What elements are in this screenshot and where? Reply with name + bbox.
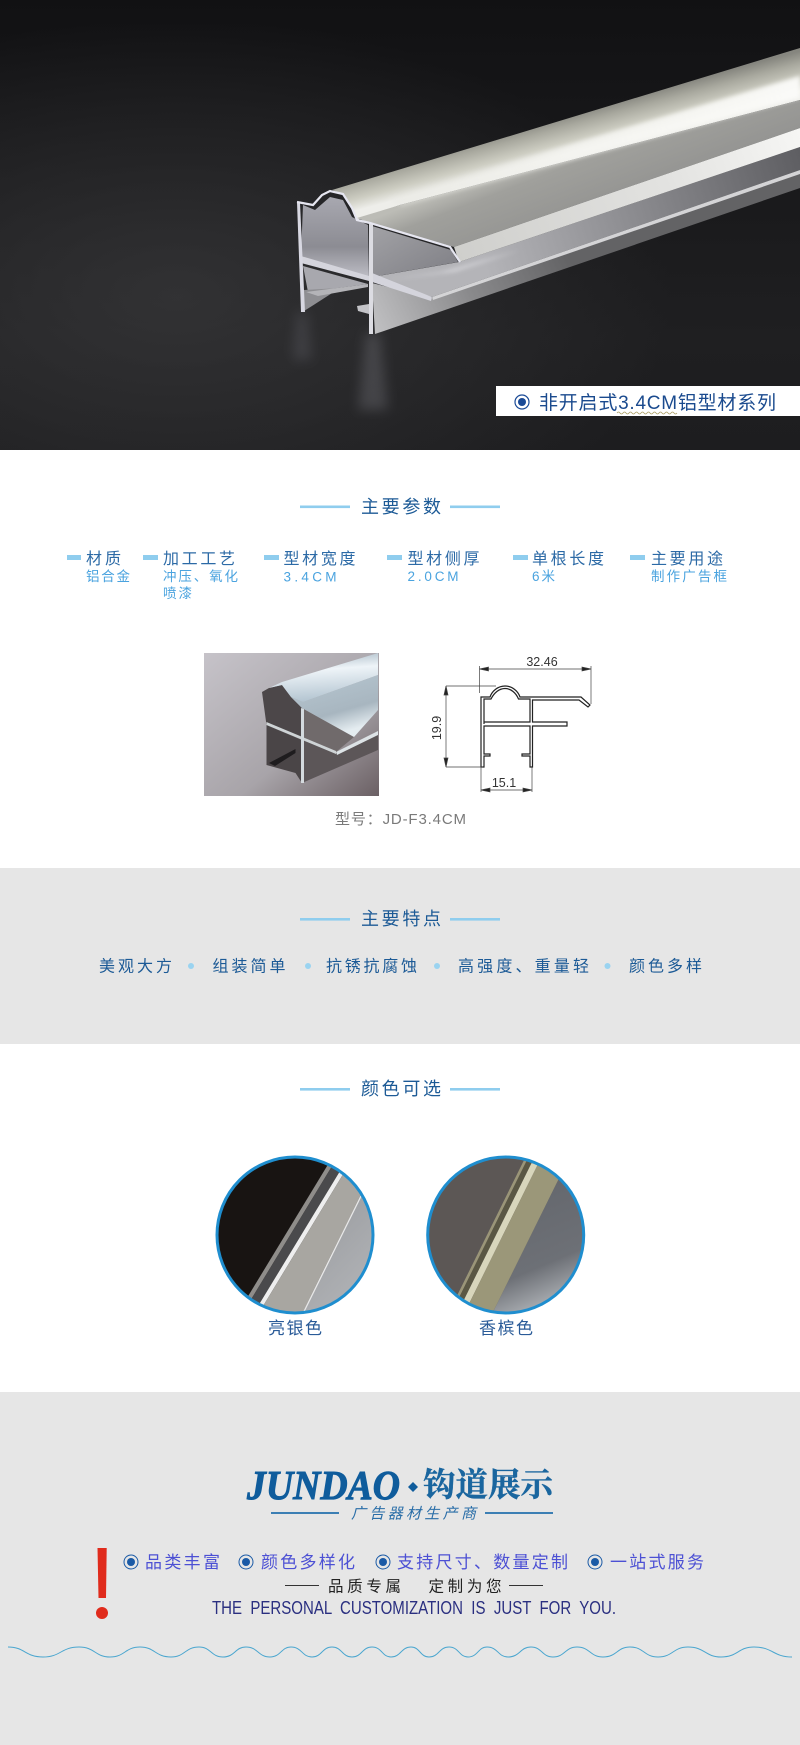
icon: caption bullet	[515, 395, 529, 409]
dimension: width 15.1	[481, 767, 532, 792]
dimension: width 32.46: 32.46	[526, 655, 558, 669]
service bullets: 一站式服务	[610, 1553, 704, 1572]
panel: footer background	[0, 1392, 800, 1745]
swatch label: 香槟色	[479, 1319, 533, 1338]
panel: features background	[0, 868, 800, 1044]
profile section outline	[481, 686, 590, 767]
feature list: 高强度、重量轻	[458, 958, 589, 976]
slogan: English: THE PERSONAL CUSTOMIZATION IS JUST FOR YOU.	[212, 1597, 616, 1618]
parameter: material	[67, 550, 130, 584]
brand logo	[246, 1459, 555, 1522]
parameter: side thickness: 2.0CM	[408, 569, 458, 584]
brand logo: 钩道展示	[423, 1459, 555, 1506]
service bullets: 颜色多样化	[261, 1553, 355, 1572]
panel: colours background	[0, 1044, 800, 1392]
parameter: profile width: 3.4CM	[284, 570, 336, 584]
caption: product series	[496, 386, 800, 416]
parameter: process	[143, 550, 238, 601]
dimension: width 32.46	[480, 655, 591, 704]
brand logo: JUNDAO	[246, 1462, 400, 1508]
feature list: 颜色多样	[629, 958, 702, 976]
swatch: champagne	[426, 1156, 586, 1336]
caption text: 非开启式3.4CM铝型材系列	[539, 392, 776, 414]
product photo: profile close-up	[204, 653, 379, 796]
feature list: 抗锈抗腐蚀	[326, 958, 417, 976]
parameter: main use: 主要用途	[651, 550, 723, 568]
swatch: bright silver	[216, 1156, 374, 1336]
parameter: main use	[630, 550, 727, 584]
parameter: length: 单根长度	[532, 550, 604, 568]
parameter: length	[513, 550, 604, 584]
parameter: length: 6米	[532, 569, 556, 584]
dimension: height 19.9	[430, 686, 496, 767]
heading: main features: 主要特点	[361, 909, 441, 929]
feature list: 美观大方	[99, 958, 172, 976]
parameter: process: 喷漆	[163, 586, 192, 601]
heading: main parameters: 主要参数	[361, 497, 441, 517]
parameter: process: 冲压、氧化	[163, 569, 238, 584]
dimension: height 19.9: 19.9	[430, 716, 444, 740]
parameter: material: 材质	[86, 550, 121, 568]
slogan: Chinese: 品质专属	[328, 1578, 401, 1596]
parameter: side thickness	[387, 550, 480, 584]
parameter: process: 加工工艺	[163, 550, 235, 568]
slogan: Chinese: 定制为您	[428, 1578, 502, 1596]
parameter: profile width	[264, 550, 356, 584]
parameter: material: 铝合金	[86, 569, 130, 584]
slogan: Chinese	[285, 1578, 543, 1596]
dimension: width 15.1: 15.1	[492, 776, 516, 790]
parameter: main use: 制作广告框	[651, 569, 727, 584]
parameter: side thickness: 型材侧厚	[408, 550, 480, 568]
panel: parameters background	[0, 450, 800, 868]
technical drawing: profile dimensions	[430, 655, 591, 792]
service bullets	[124, 1553, 704, 1572]
icon: red exclamation mark	[96, 1548, 108, 1619]
model number: 型号：JD-F3.4CM	[335, 811, 466, 828]
feature list	[99, 958, 702, 976]
service bullets: 支持尺寸、数量定制	[397, 1553, 568, 1572]
brand logo: 广告器材生产商	[351, 1506, 478, 1522]
parameter: profile width: 型材宽度	[284, 550, 356, 568]
hero photo: aluminium profile on dark surface	[0, 0, 800, 450]
swatch label: 亮银色	[268, 1319, 322, 1338]
feature list: 组装简单	[212, 958, 286, 976]
heading: colour options: 颜色可选	[361, 1079, 441, 1099]
service bullets: 品类丰富	[145, 1553, 220, 1572]
